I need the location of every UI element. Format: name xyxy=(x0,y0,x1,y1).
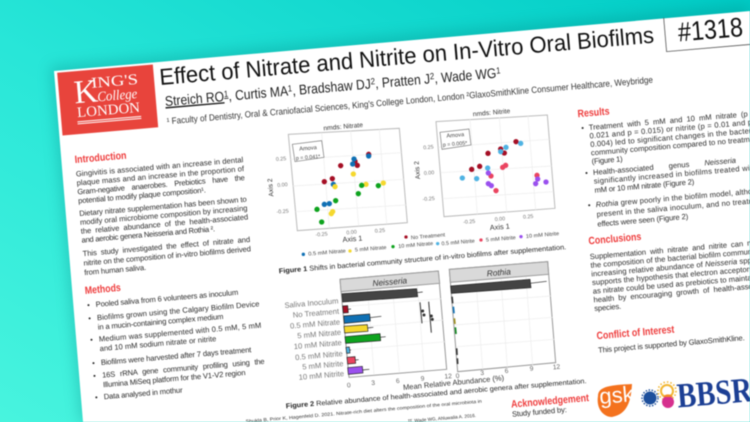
icon: magenta microbe xyxy=(662,394,674,408)
figure 2: relative abundance bars xyxy=(279,244,587,410)
caption: figure 1: Figure 1 Shifts in bacterial community structure of in-vitro biofilms after supplementation. xyxy=(279,244,567,275)
logo: King's College London: College xyxy=(97,87,138,105)
text block: introduction: Dietary nitrate supplementation has been shown to xyxy=(79,195,247,218)
legend: treatment groups: 10 mM Nitrate xyxy=(398,241,433,250)
text block: introduction: from human saliva. xyxy=(84,263,146,277)
heading: methods: Methods xyxy=(84,282,121,297)
title: Effect of Nitrate and Nitrite on In-Vitro Oral Biofilms xyxy=(158,22,655,90)
logo: BBSRC xyxy=(642,368,750,415)
chart: rothia: 3 xyxy=(480,370,485,377)
icon: blue cell xyxy=(642,390,658,406)
chart: nmds nitrate: nmds: Nitrate xyxy=(323,122,364,132)
chart: nmds nitrite xyxy=(414,108,555,232)
bullet list: methods: 16S rRNA gene community profiling using the xyxy=(102,357,265,380)
chart: nmds nitrite: -0.25 xyxy=(422,196,435,203)
legend box: anova: p = 0.041* xyxy=(296,154,321,162)
chart: neisseria: 0.5 mM Nitrate xyxy=(290,317,340,331)
bullet list: methods: • xyxy=(88,314,92,323)
text block: introduction: the relative abundance of the health-associated xyxy=(80,212,249,236)
authors: , Curtis MA xyxy=(228,83,289,104)
legend: treatment groups: 5 mM Nitrite xyxy=(486,235,516,244)
chart: neisseria: 10 mM Nitrite xyxy=(298,369,344,382)
authors: 2 xyxy=(429,70,435,82)
chart: neisseria: No Treatment xyxy=(292,307,340,320)
chart: nmds nitrite: nmds: Nitrite xyxy=(473,108,511,118)
significance brackets xyxy=(420,302,433,333)
text block: introduction: modify oral microbiome composition by increasing xyxy=(80,204,248,227)
chart: rothia: 12 xyxy=(553,364,561,371)
bullet list: methods: • xyxy=(92,359,95,368)
bullet list: methods: and 10 mM sodium nitrate or nitrite xyxy=(99,334,217,353)
chart: nmds nitrite: 0.25 xyxy=(423,144,434,151)
legend: treatment groups: No Treatment xyxy=(411,232,446,241)
text block: funding: Study funded by: xyxy=(512,405,567,419)
bullet list: methods: • xyxy=(87,300,91,310)
bullet list: methods: • xyxy=(90,335,93,344)
chart: nmds nitrate: -0.25 xyxy=(315,231,328,239)
panel: acknowledgement xyxy=(511,392,591,419)
bullet list: methods: in a mucin-containing complex medium xyxy=(97,312,224,332)
bullet list: results xyxy=(581,108,750,229)
chart: nmds nitrate: 0.25 xyxy=(374,228,385,235)
chart: neisseria: 5 mM Nitrite xyxy=(302,359,344,372)
bullet list: methods: Illumina MiSeq platform for the V1-V2 region xyxy=(103,368,246,389)
chart: rothia xyxy=(449,262,561,380)
bullet list: methods: Biofilms were harvested after 7 days treatment xyxy=(100,345,253,367)
legend box: anova: Amova xyxy=(446,132,465,140)
figure 1: ordination plots xyxy=(267,108,559,258)
legend box: anova xyxy=(440,129,471,149)
legend: treatment groups: 5 mM Nitrate xyxy=(355,245,387,254)
chart: neisseria: 5 mM Nitrate xyxy=(297,328,341,340)
bullet list: results: • xyxy=(585,168,589,178)
chart: rothia: 9 xyxy=(529,366,534,373)
chart: neisseria: 3 xyxy=(371,380,376,387)
chart: nmds nitrite: 0.00 xyxy=(494,216,505,223)
heading: introduction: Introduction xyxy=(74,150,127,166)
authors: Streich RO xyxy=(164,88,229,109)
panel: introduction xyxy=(74,140,253,277)
chart: nmds nitrite: 0.25 xyxy=(523,214,534,221)
chart: nmds nitrate: Axis 1 xyxy=(342,234,363,244)
legend: treatment groups xyxy=(302,231,559,258)
chart: rothia: 0 xyxy=(455,373,460,380)
bullet list: methods xyxy=(87,286,267,402)
icon: sun xyxy=(658,382,676,400)
logo: King's College London: LONDON xyxy=(77,100,141,121)
bullet list: methods: Biofilms grown using the Calgary Biofilm Device xyxy=(97,299,260,322)
text block: introduction: Gram-negative anaerobes. Prebiotics have the xyxy=(77,173,245,196)
chart: rothia: 6 xyxy=(504,368,509,375)
chart: nmds nitrite: Axis 2 xyxy=(414,161,422,179)
bullet list: results: effects were seen (Figure 2) xyxy=(597,212,689,229)
legend: treatment groups: 0.5 mM Nitrate xyxy=(308,248,346,258)
bullet list: methods: • xyxy=(95,393,98,402)
chart: nmds nitrate: 0.25 xyxy=(276,156,287,163)
authors: 2 xyxy=(370,76,376,87)
legend box: anova: p = 0.005* xyxy=(443,141,468,149)
legend: treatment groups: 10 mM Nitrite xyxy=(526,231,559,240)
panel: conflict of interest xyxy=(596,318,745,355)
text block: introduction: plaque mass and an increase in the proportion of xyxy=(76,164,245,187)
bullet list: results: mM or 10 mM nitrate (Figure 2) xyxy=(594,177,695,195)
bullet list: methods: Data analysed in mothur xyxy=(103,385,183,401)
bullet list: methods: Medium was supplemented with 0.5 mM, 5 mM xyxy=(98,321,262,344)
bullet list: results: (Figure 1) xyxy=(591,154,623,166)
caption: figure 2: Figure 2 Relative abundance of health-associated and aerobic genera after supplementation. xyxy=(286,378,587,410)
chart: nmds nitrate xyxy=(267,122,407,244)
authors: , Bradshaw DJ xyxy=(292,76,371,98)
bullet list: results: • xyxy=(588,201,591,210)
heading: conflict of interest: Conflict of Interest xyxy=(596,324,675,342)
text block: introduction: Gingivitis is associated with an increase in dental xyxy=(75,155,244,178)
bullet list: methods: • xyxy=(93,371,97,380)
chart: neisseria: 0 xyxy=(347,382,351,389)
authors: 1 xyxy=(496,65,501,76)
authors: 1 xyxy=(287,83,293,94)
panel: methods xyxy=(84,270,267,402)
text block: introduction: nitrite on the composition of in-vitro biofilms derived xyxy=(83,244,251,268)
strip: neisseria xyxy=(340,271,440,292)
panel: results xyxy=(577,93,750,230)
legend: treatment groups: 0.5 mM Nitrite xyxy=(441,238,475,247)
text block: introduction: This study investigated the effect of nitrate and xyxy=(82,235,250,258)
bullet list: methods: Pooled saliva from 6 volunteers as inoculum xyxy=(95,288,239,309)
chart: neisseria: 10 mM Nitrate xyxy=(293,338,342,351)
logo: GSK: gsk xyxy=(598,381,636,409)
chart: nmds nitrate: 0.00 xyxy=(277,182,288,189)
chart: nmds nitrate: Axis 2 xyxy=(267,178,275,197)
chart: neisseria xyxy=(284,271,452,389)
text block: conclusions xyxy=(589,237,750,313)
logo: King's College London: ING'S xyxy=(91,72,139,92)
legend box: anova: Amova xyxy=(299,145,318,153)
chart: nmds nitrite: Axis 1 xyxy=(489,222,510,232)
logo: King's College London: K xyxy=(72,73,99,111)
chart: nmds nitrate: -0.25 xyxy=(276,209,289,216)
chart: nmds nitrite: 0.00 xyxy=(424,170,435,177)
chart: neisseria: 6 xyxy=(396,378,400,385)
heading: results: Results xyxy=(577,106,610,120)
text block: conflict of interest: This project is supported by GlaxoSmithKline. xyxy=(598,333,745,355)
strip: neisseria: Neisseria xyxy=(372,275,408,288)
bullet list: results: • xyxy=(581,123,585,133)
text block: introduction: potential to modify plaque composition¹. xyxy=(78,185,206,205)
chart: nmds nitrite: -0.25 xyxy=(463,219,476,226)
chart: neisseria: 0.5 mM Nitrite xyxy=(295,349,343,362)
text block: introduction: and aerobic genera Neisseria and Rothia ². xyxy=(81,224,215,245)
authors: , Pratten J xyxy=(374,71,431,91)
axis title: Mean Relative Abundance (%) xyxy=(403,373,505,392)
strip: rothia: Rothia xyxy=(486,266,512,278)
authors: , Wade WG xyxy=(434,65,497,86)
chart: neisseria: 12 xyxy=(444,373,452,381)
heading: acknowledgement: Acknowledgement xyxy=(511,392,590,411)
heading: conclusions: Conclusions xyxy=(588,231,642,247)
chart: nmds nitrate: 0.00 xyxy=(346,230,357,236)
chart: neisseria: 9 xyxy=(420,376,425,383)
affiliations: ¹ Faculty of Dentistry, Oral & Craniofacial Sciences, King's College London, London ²GlaxoSmithKline Consumer Healthcare, Weybridge xyxy=(166,75,653,126)
authors: 1 xyxy=(223,88,229,99)
panel: conclusions xyxy=(588,220,750,313)
logo: King's College London xyxy=(57,65,158,136)
chart: neisseria: Saliva Inoculum xyxy=(284,296,339,310)
text block: introduction xyxy=(75,155,253,277)
text block: conclusions: species. xyxy=(594,302,622,313)
legend box: anova xyxy=(292,141,324,162)
